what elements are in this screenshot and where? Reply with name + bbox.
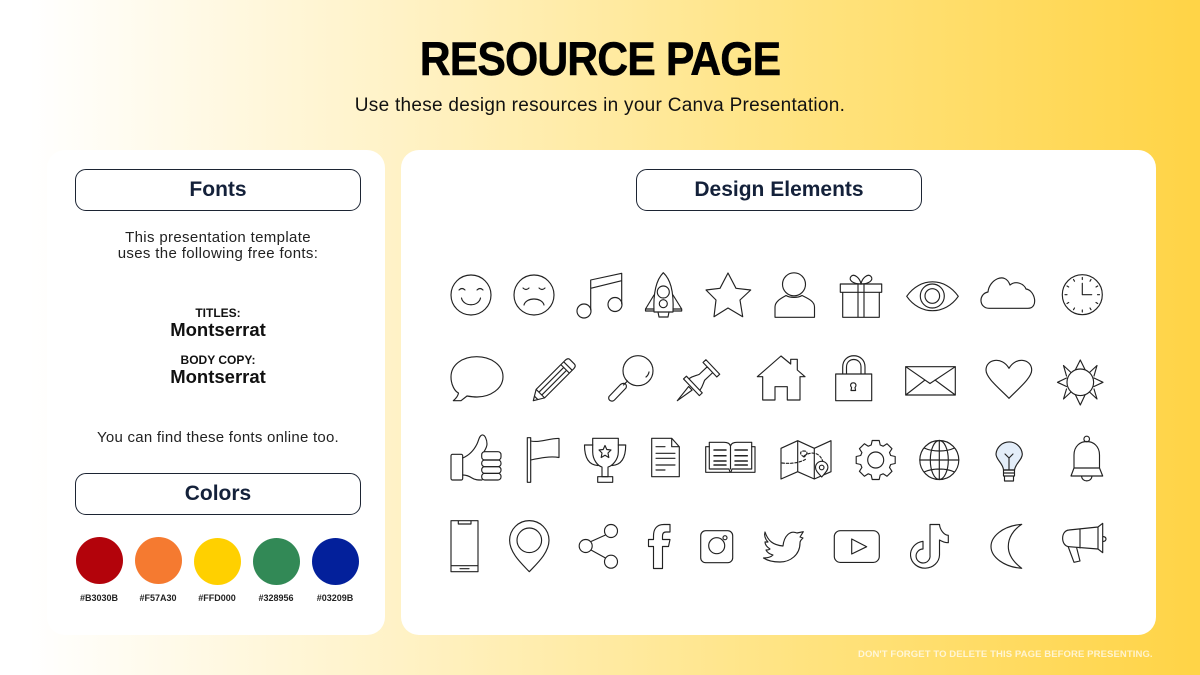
text: titles font bbox=[170, 306, 266, 340]
subtitle: Use these design resources in your Canva Presentation. bbox=[355, 95, 845, 116]
text: body copy font: Montserrat bbox=[170, 366, 266, 387]
icon: person bbox=[775, 273, 814, 317]
icon: instagram bbox=[701, 531, 733, 563]
text: body copy font: BODY COPY: bbox=[181, 353, 255, 367]
icon: globe bbox=[920, 440, 959, 480]
icon: map bbox=[781, 441, 831, 479]
heading: colors: Colors bbox=[185, 482, 251, 505]
icon: youtube bbox=[834, 531, 879, 562]
icon: map pin bbox=[510, 521, 549, 572]
heading: fonts bbox=[75, 169, 361, 211]
swatch: green bbox=[253, 538, 300, 585]
swatch: orange bbox=[135, 537, 182, 584]
text: fonts intro: This presentation template bbox=[125, 229, 311, 246]
icon: sad face bbox=[514, 275, 554, 315]
label: orange hex: #F57A30 bbox=[139, 593, 177, 603]
icon: gear bbox=[856, 440, 895, 480]
text: fonts note: You can find these fonts online too. bbox=[97, 429, 339, 446]
icon: speech bubble bbox=[451, 357, 503, 401]
icon: share bbox=[579, 524, 618, 568]
icon: crescent moon bbox=[991, 524, 1022, 568]
icon: tiktok bbox=[911, 524, 948, 568]
icon: music note bbox=[577, 273, 622, 318]
panel: fonts and colors bbox=[47, 150, 385, 635]
icon: eye bbox=[907, 282, 958, 311]
icon: sun bbox=[1058, 360, 1103, 405]
text: titles font: TITLES: bbox=[195, 306, 241, 320]
icon: padlock bbox=[836, 356, 872, 401]
text: fonts intro: uses the following free fonts: bbox=[118, 245, 318, 262]
label: yellow hex: #FFD000 bbox=[198, 593, 236, 603]
heading: design elements: Design Elements bbox=[694, 178, 864, 201]
icon: document bbox=[652, 438, 679, 477]
swatch: red bbox=[76, 537, 123, 584]
footer note: DON'T FORGET TO DELETE THIS PAGE BEFORE PRESENTING. bbox=[858, 649, 1153, 660]
icon: star bbox=[706, 273, 751, 317]
icon: megaphone bbox=[1063, 523, 1106, 562]
icon: clock bbox=[1062, 275, 1102, 315]
heading: design elements bbox=[636, 169, 922, 211]
icon: trophy bbox=[584, 438, 626, 482]
icon: cloud bbox=[981, 278, 1035, 308]
text: fonts intro bbox=[118, 229, 318, 262]
heading: colors bbox=[75, 473, 361, 515]
icon: pencil bbox=[529, 358, 576, 405]
swatch: yellow bbox=[194, 538, 241, 585]
label: blue hex: #03209B bbox=[317, 593, 353, 603]
icon: rocket bbox=[646, 273, 682, 317]
label: red hex: #B3030B bbox=[80, 593, 118, 603]
panel: design elements bbox=[401, 150, 1156, 635]
icon: heart bbox=[986, 360, 1032, 398]
label: green hex: #328956 bbox=[258, 593, 294, 603]
icon: twitter bbox=[764, 532, 803, 562]
icon: facebook bbox=[648, 524, 670, 568]
icon: smartphone bbox=[451, 521, 478, 572]
icon: magnifying glass bbox=[609, 356, 653, 401]
icon: smile bbox=[451, 275, 491, 315]
icon: flag bbox=[527, 438, 559, 482]
swatch: blue bbox=[312, 538, 359, 585]
icon: push pin bbox=[669, 359, 721, 409]
icon: house bbox=[757, 356, 805, 400]
text: body copy font bbox=[170, 353, 266, 387]
icon: open book bbox=[706, 442, 755, 472]
icon: envelope bbox=[906, 367, 955, 395]
icon: bell bbox=[1071, 436, 1103, 481]
heading: fonts: Fonts bbox=[189, 178, 247, 201]
text: titles font: Montserrat bbox=[170, 319, 266, 340]
icon: gift bbox=[840, 275, 882, 317]
icon grid bbox=[450, 272, 1107, 572]
title: RESOURCE PAGE bbox=[420, 32, 780, 85]
icon: light bulb bbox=[996, 442, 1022, 481]
icon: thumbs up bbox=[451, 435, 501, 480]
